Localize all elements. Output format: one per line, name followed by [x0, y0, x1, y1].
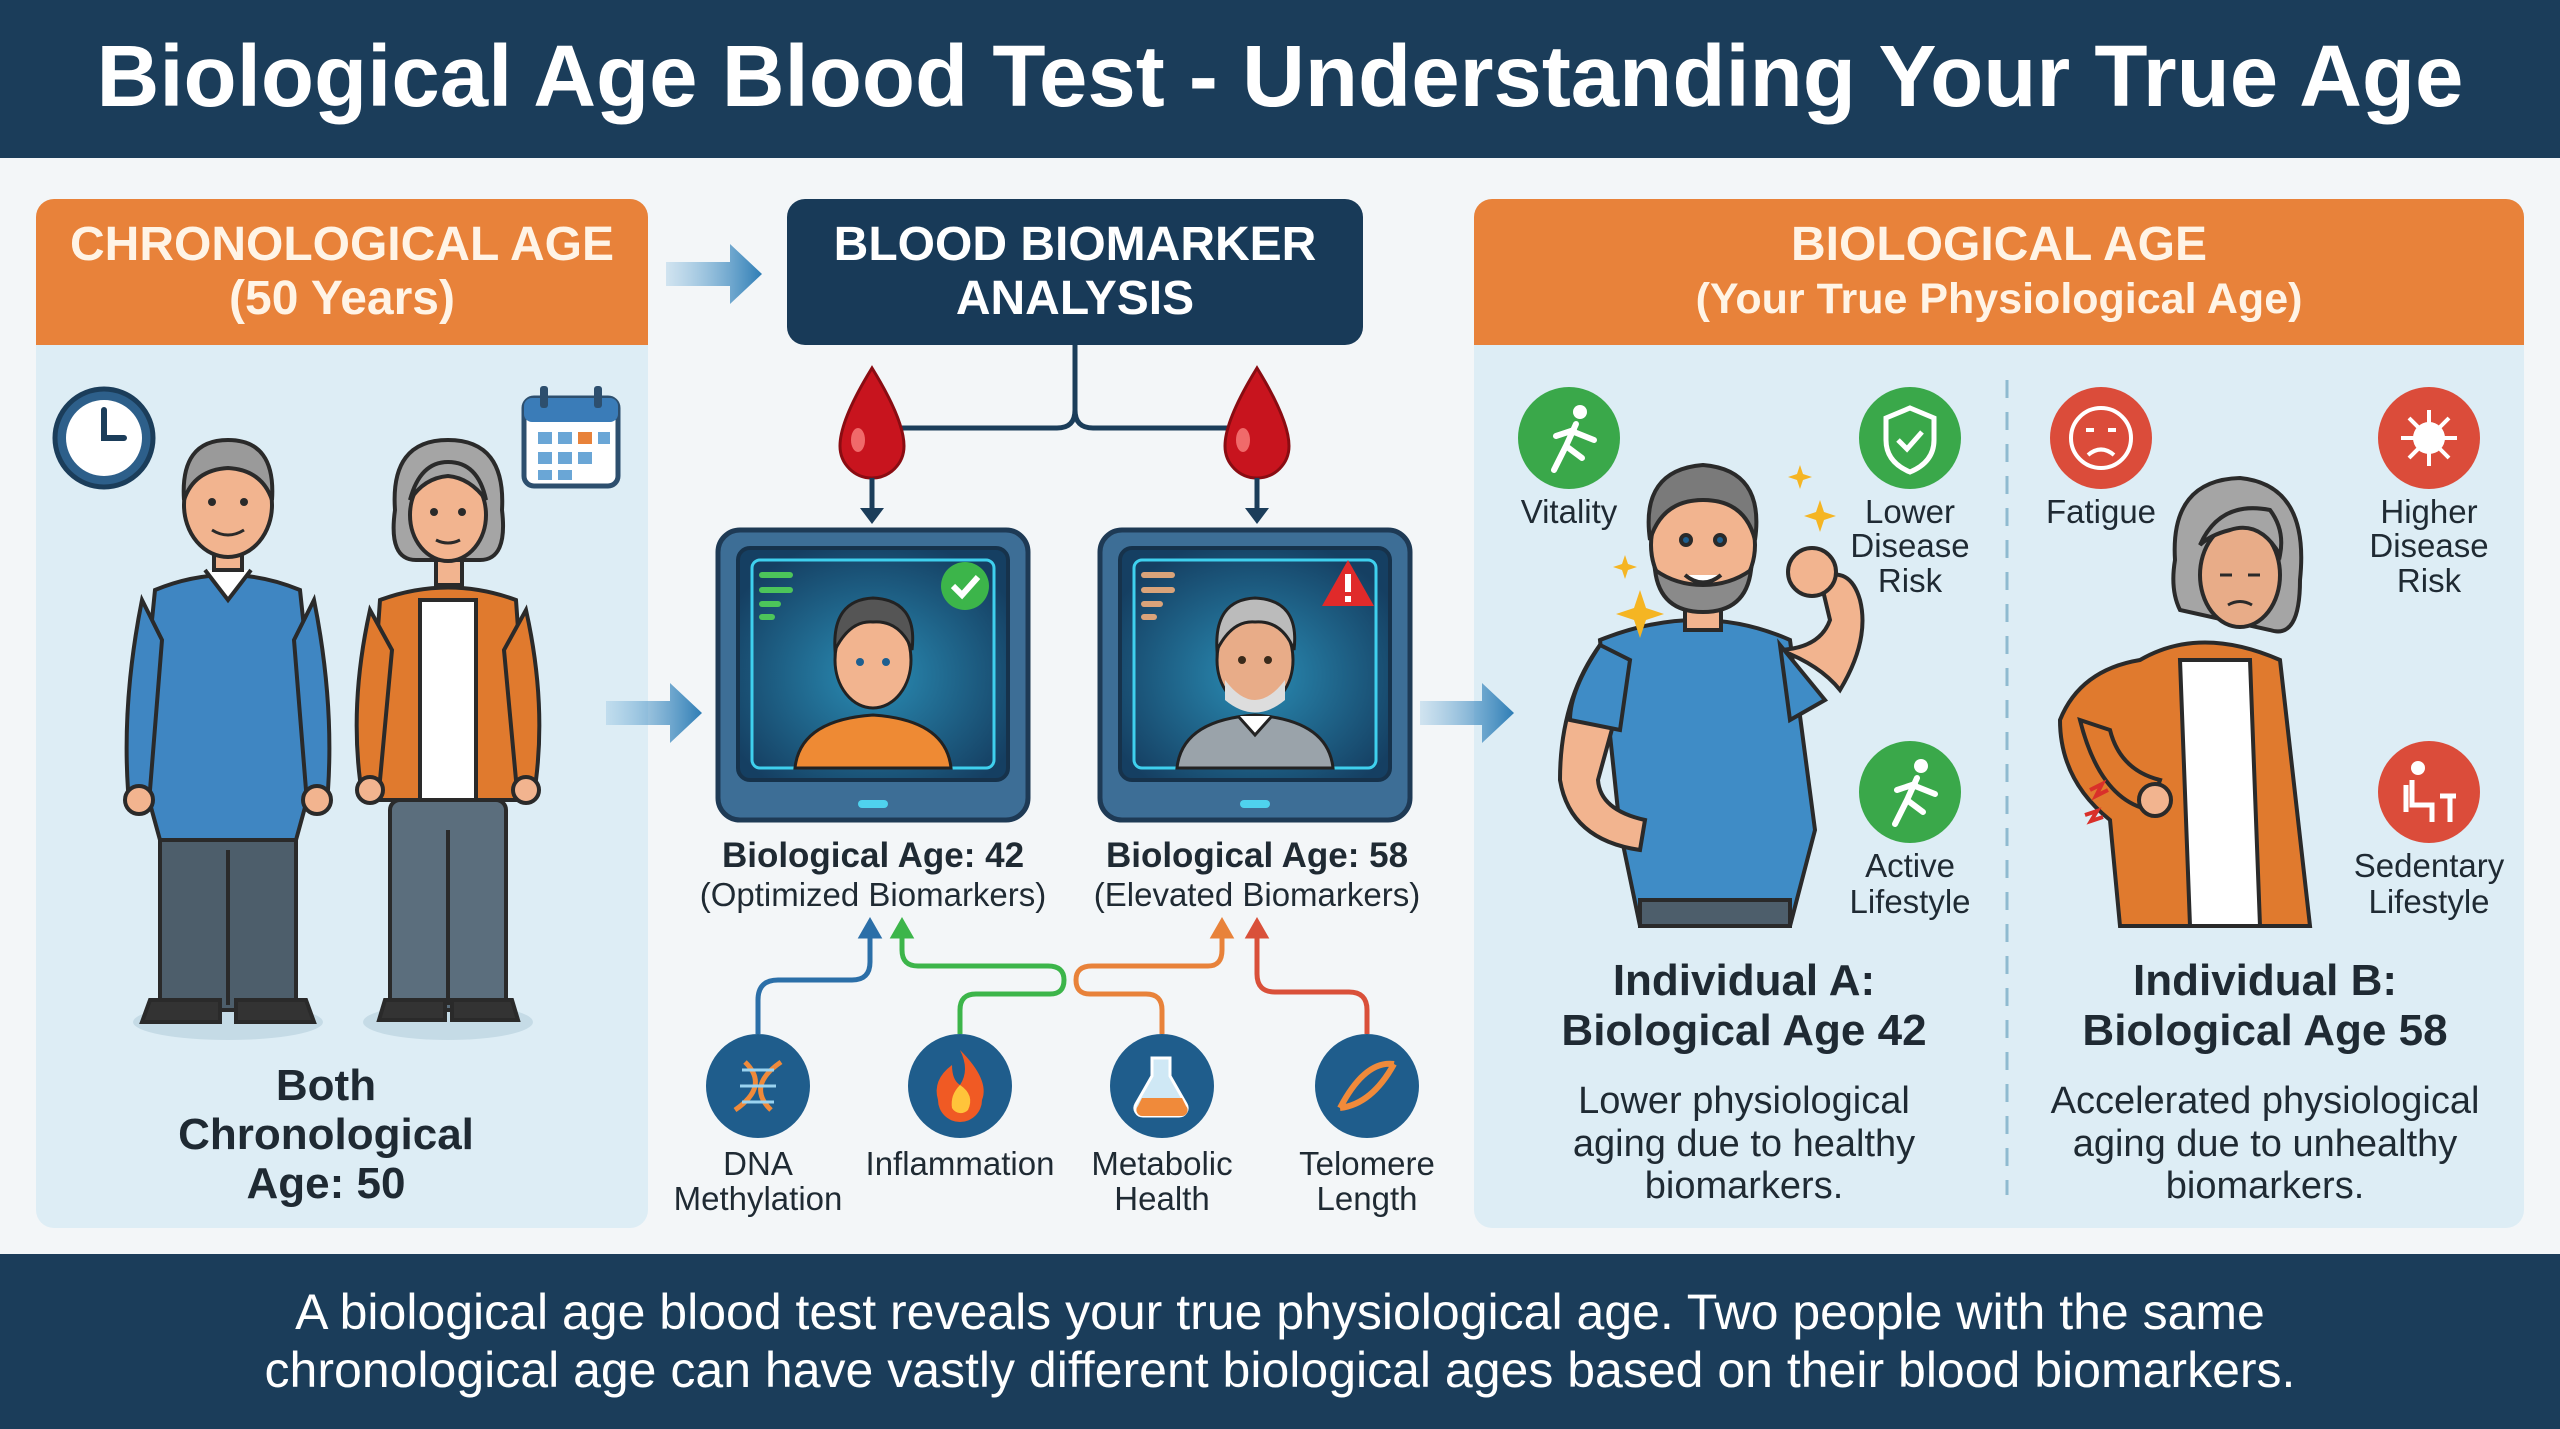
- icon: metabolic health: Metabolic: [1091, 1145, 1233, 1182]
- label: biological age 42: [700, 836, 1046, 913]
- icon: clock: [55, 389, 153, 487]
- arrow: to biological age: [1420, 683, 1514, 743]
- biomarker connector arrows: [758, 922, 1367, 1034]
- panel: chronological age: CHRONOLOGICAL AGE: [70, 218, 614, 271]
- text: individual B: aging due to unhealthy: [2073, 1123, 2457, 1165]
- label: biological age 42: (Optimized Biomarkers): [700, 876, 1046, 913]
- icon: telomere length: Telomere: [1299, 1145, 1435, 1182]
- text: individual A: Lower physiological: [1578, 1080, 1910, 1122]
- icon: inflammation: [866, 1034, 1054, 1182]
- figure: older man: [125, 440, 331, 1040]
- text: both chronological age: Chronological: [178, 1110, 474, 1159]
- text: individual B: Individual B:: [2133, 956, 2397, 1005]
- panel: biological age: (Your True Physiological Age): [1696, 275, 2302, 323]
- icon: active lifestyle: Active: [1865, 847, 1955, 884]
- label: biological age 58: Biological Age: 58: [1106, 836, 1408, 875]
- icon: sedentary lifestyle: [2354, 741, 2505, 920]
- icon: higher disease risk: Disease: [2369, 527, 2489, 564]
- icon: lower disease risk: [1850, 387, 1970, 599]
- arrow: to monitors: [606, 683, 702, 743]
- icon: higher disease risk: [2369, 387, 2489, 599]
- text: individual A: biomarkers.: [1645, 1165, 1843, 1207]
- icon: dna methylation: DNA: [723, 1145, 793, 1182]
- label: biological age 58: [1094, 836, 1420, 913]
- panel: chronological age: [36, 199, 648, 1228]
- icon: higher disease risk: Higher: [2380, 493, 2478, 530]
- icon: sedentary lifestyle: Sedentary: [2354, 847, 2505, 884]
- title bar: [0, 0, 2560, 158]
- label: biological age 42: Biological Age: 42: [722, 836, 1024, 875]
- footer: chronological age can have vastly different biological ages based on their blood biomarkers.: [265, 1342, 2295, 1398]
- text: individual B: [2051, 956, 2479, 1207]
- icon: telomere length: [1299, 1034, 1435, 1217]
- icon: active lifestyle: Lifestyle: [1849, 883, 1971, 920]
- icon: sparkles: [1613, 465, 1836, 638]
- icon: blood drop right: [1225, 368, 1289, 524]
- text: individual A: aging due to healthy: [1573, 1123, 1915, 1165]
- icon: inflammation: Inflammation: [866, 1145, 1054, 1182]
- footer: A biological age blood test reveals your true physiological age. Two people with the same: [295, 1284, 2265, 1340]
- panel: biological age: [1474, 199, 2524, 1228]
- icon: vitality: [1518, 387, 1620, 530]
- footer: [0, 1254, 2560, 1429]
- box: blood biomarker analysis: [787, 199, 1363, 345]
- icon: pain marks: [2085, 784, 2108, 821]
- icon: metabolic health: [1091, 1034, 1233, 1217]
- text: individual B: Biological Age 58: [2082, 1006, 2448, 1055]
- text: both chronological age: Age: 50: [247, 1159, 405, 1208]
- figure: individual A man: [1560, 465, 1862, 926]
- icon: lower disease risk: Lower: [1865, 493, 1955, 530]
- icon: fatigue: [2046, 387, 2156, 530]
- icon: fatigue: Fatigue: [2046, 493, 2156, 530]
- title bar: Biological Age Blood Test - Understanding Your True Age: [97, 28, 2463, 125]
- figure: older woman: [357, 440, 539, 1040]
- icon: vitality: Vitality: [1521, 493, 1618, 530]
- arrow: to analysis: [666, 244, 762, 304]
- icon: telomere length: Length: [1317, 1180, 1417, 1217]
- label: biological age 58: (Elevated Biomarkers): [1094, 876, 1420, 913]
- text: both chronological age: Both: [276, 1061, 376, 1110]
- text: individual B: Accelerated physiological: [2051, 1080, 2479, 1122]
- icon: dna methylation: [674, 1034, 842, 1217]
- box: blood biomarker analysis: BLOOD BIOMARKER: [834, 218, 1316, 271]
- text: individual A: Individual A:: [1613, 956, 1875, 1005]
- icon: blood drop left: [840, 368, 904, 524]
- text: individual B: biomarkers.: [2166, 1165, 2364, 1207]
- icon: calendar: [524, 386, 618, 486]
- text: individual A: [1561, 956, 1927, 1207]
- text: both chronological age: [178, 1061, 474, 1208]
- panel: chronological age: (50 Years): [229, 272, 455, 325]
- monitor: old: [1100, 530, 1410, 820]
- figure: individual B woman: [2060, 478, 2310, 926]
- box: blood biomarker analysis: ANALYSIS: [956, 272, 1194, 325]
- panel: biological age: BIOLOGICAL AGE: [1791, 218, 2207, 271]
- icon: metabolic health: Health: [1114, 1180, 1210, 1217]
- connector lines: [890, 345, 1237, 428]
- text: individual A: Biological Age 42: [1561, 1006, 1927, 1055]
- icon: active lifestyle: [1849, 741, 1971, 920]
- icon: dna methylation: Methylation: [674, 1180, 842, 1217]
- icon: higher disease risk: Risk: [2397, 562, 2462, 599]
- icon: sedentary lifestyle: Lifestyle: [2368, 883, 2490, 920]
- icon: lower disease risk: Risk: [1878, 562, 1943, 599]
- monitor: young: [718, 530, 1028, 820]
- icon: lower disease risk: Disease: [1850, 527, 1970, 564]
